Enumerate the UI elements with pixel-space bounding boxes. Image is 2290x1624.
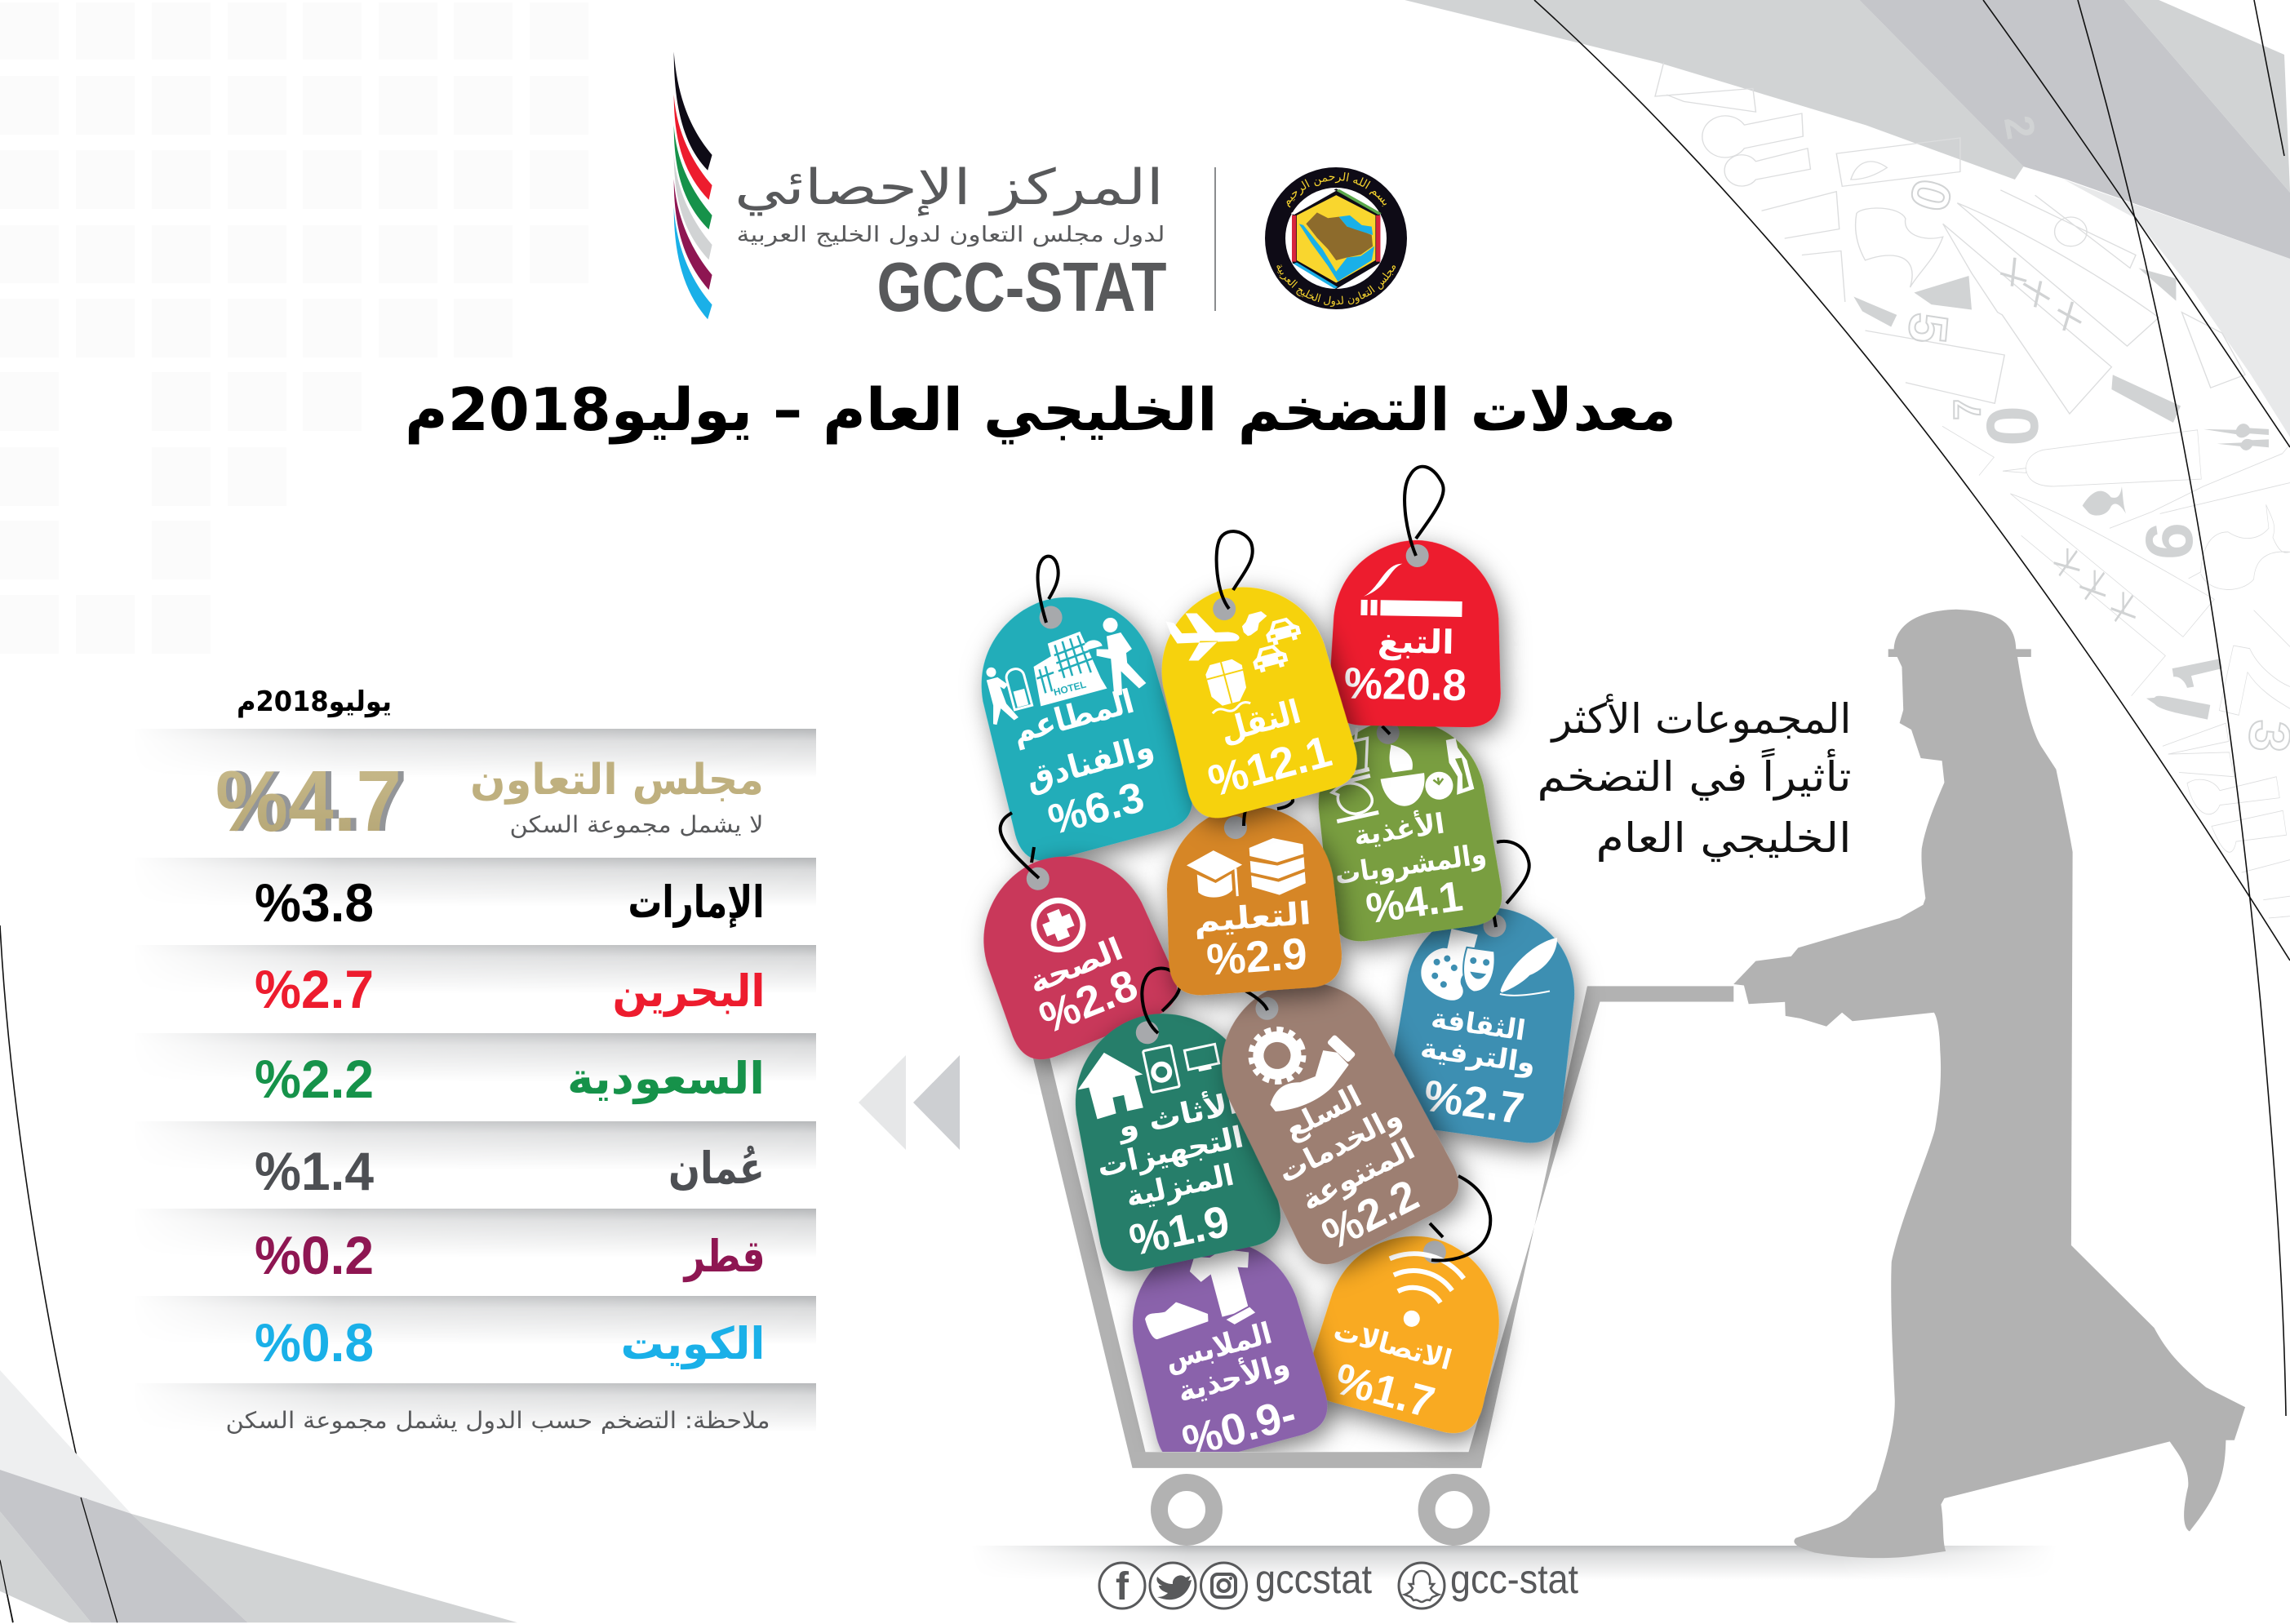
emblem: GCC seal bbox=[1265, 167, 1407, 309]
logo: GCC-STAT wordmark: GCC-STAT bbox=[877, 249, 1167, 326]
tag: communications: الاتصالات bbox=[1330, 1314, 1455, 1377]
background: faint line art bbox=[1655, 46, 2290, 918]
row: Bahrain: %2.7 bbox=[255, 959, 374, 1019]
tag: miscellaneous goods and services: والخدمات bbox=[1273, 1099, 1407, 1190]
tag: furniture and household equipment: المنزلية bbox=[1123, 1159, 1237, 1214]
tag: transport: %12.1 bbox=[1203, 726, 1337, 806]
background: faint line art: 2 bbox=[1995, 112, 2044, 143]
row: Kuwait: %0.8 bbox=[255, 1312, 374, 1373]
tag: culture and entertainment: والترفية bbox=[1418, 1032, 1538, 1080]
row: UAE bbox=[255, 872, 764, 933]
background: faint squares bbox=[0, 2, 588, 654]
tag: furniture and household equipment: التجهيزات bbox=[1094, 1120, 1246, 1184]
tag: food and beverages: الأغذية bbox=[1351, 806, 1447, 853]
background: bottom left grey shapes bbox=[0, 1370, 517, 1622]
background: top right grey shapes bbox=[1405, 0, 2290, 437]
icon: cigarette bbox=[1360, 563, 1462, 617]
shopping cart bbox=[1030, 986, 1733, 1537]
icon: house, washer, screen bbox=[1072, 1030, 1225, 1122]
row: GCC: مجلس التعاون bbox=[470, 756, 764, 805]
tag: food and beverages: والمشروبات bbox=[1333, 838, 1489, 891]
social: gccstat handle: gccstat bbox=[1255, 1556, 1372, 1602]
arrows: double chevron bbox=[859, 1055, 960, 1150]
logo: GCC-STAT ribbon bbox=[674, 51, 712, 319]
tag: food and beverages bbox=[1305, 708, 1506, 945]
tag: furniture and household equipment: %1.9 bbox=[1125, 1196, 1234, 1266]
row: Oman bbox=[255, 1141, 765, 1201]
row: Saudi Arabia: %2.2 bbox=[255, 1049, 374, 1109]
background: faint line art: 9 bbox=[2132, 522, 2206, 560]
row: Bahrain: البحرين bbox=[612, 965, 766, 1017]
tag: communications bbox=[1302, 1176, 1521, 1440]
tag: miscellaneous goods and services: %2.2 bbox=[1315, 1170, 1427, 1260]
tag: restaurants and hotels: والفنادق bbox=[1022, 728, 1158, 798]
tag: health: الصحة bbox=[1023, 930, 1128, 1001]
social: facebook bbox=[1099, 1563, 1145, 1608]
background: faint line art: 5 bbox=[1897, 310, 1959, 346]
tag: clothing and footwear: %0.9- bbox=[1178, 1390, 1301, 1466]
tag: clothing and footwear: والأحذية bbox=[1174, 1345, 1294, 1409]
row: UAE: الإمارات bbox=[628, 876, 764, 928]
tag: furniture and household equipment: الأثاث و bbox=[1112, 1085, 1241, 1145]
ground shadow bbox=[997, 1546, 2030, 1575]
social: gcc-stat handle: gcc-stat bbox=[1450, 1556, 1578, 1602]
tag: education: %2.9 bbox=[1205, 929, 1309, 985]
icon: shirt and shoes bbox=[1145, 1250, 1255, 1340]
icon: gear and hand bbox=[1240, 1000, 1366, 1119]
icon: wifi bbox=[1374, 1246, 1467, 1337]
row: GCC: %4.7 bbox=[221, 753, 407, 850]
row: Oman: عُمان bbox=[668, 1143, 765, 1194]
tag: clothing and footwear: الملابس bbox=[1161, 1316, 1276, 1378]
tag: tobacco: %20.8 bbox=[1343, 659, 1467, 710]
tag: tobacco: التبغ bbox=[1377, 623, 1454, 662]
icon: food items bbox=[1324, 713, 1476, 822]
tag: health: %2.8 bbox=[1032, 961, 1144, 1043]
row: Kuwait bbox=[255, 1312, 766, 1373]
tag: furniture and household equipment bbox=[1056, 968, 1286, 1277]
row: Kuwait: الكويت bbox=[620, 1318, 766, 1369]
row: Saudi Arabia: السعودية bbox=[567, 1053, 765, 1104]
left table: shadow bands bbox=[135, 729, 816, 1432]
icon: hotel, porter and waiter bbox=[974, 613, 1147, 729]
row: GCC bbox=[215, 753, 764, 850]
string: restaurants tag bbox=[1038, 557, 1058, 623]
row: GCC: %4.7 bbox=[215, 753, 402, 850]
social: twitter bbox=[1150, 1563, 1196, 1608]
tag: restaurants and hotels: %6.3 bbox=[1043, 774, 1149, 844]
tag: education bbox=[1158, 786, 1344, 997]
tag: transport: النقل bbox=[1216, 693, 1305, 751]
tag: food and beverages: %4.1 bbox=[1363, 872, 1466, 933]
title: معدلات التضخم الخليجي العام – يوليو2018م bbox=[405, 375, 1676, 445]
icon: hotel, porter and waiter: HOTEL bbox=[1052, 678, 1087, 698]
background: faint line art: 0 bbox=[1971, 406, 2053, 446]
logo: Arabic subtitle: لدول مجلس التعاون لدول الخليج العربية bbox=[736, 223, 1165, 247]
table date heading: يوليو2018م bbox=[237, 686, 392, 718]
tag: culture and entertainment: %2.7 bbox=[1421, 1072, 1527, 1134]
row: Oman: %1.4 bbox=[255, 1141, 374, 1201]
table note: ملاحظة: التضخم حسب الدول يشمل مجموعة السكن bbox=[225, 1407, 770, 1434]
tag: culture and entertainment: الثقافة bbox=[1429, 1002, 1528, 1048]
social: snapchat bbox=[1399, 1563, 1445, 1608]
side caption: المجموعات الأكثر bbox=[1549, 694, 1851, 743]
social: facebook: f bbox=[1116, 1565, 1129, 1608]
icon: graduation cap and books bbox=[1185, 836, 1307, 901]
row: Qatar bbox=[255, 1225, 766, 1285]
background: faint line art: 0 bbox=[1897, 173, 1964, 217]
tag: restaurants and hotels: المطاعم bbox=[1009, 683, 1138, 751]
row: Bahrain bbox=[255, 959, 766, 1019]
emblem: GCC seal: بسم الله الرحمن الرحيم bbox=[1286, 172, 1387, 207]
logo: Arabic name: المركز الإحصائي bbox=[734, 159, 1164, 216]
logo divider bbox=[1214, 167, 1216, 311]
side caption: تأثيراً في التضخم bbox=[1538, 748, 1851, 801]
tag: education: التعليم bbox=[1192, 895, 1312, 940]
social: instagram bbox=[1201, 1563, 1247, 1608]
row: UAE: %3.8 bbox=[255, 872, 374, 933]
tag: restaurants and hotels bbox=[959, 577, 1199, 867]
row: Saudi Arabia bbox=[255, 1049, 765, 1109]
side caption bbox=[1538, 694, 1851, 862]
tag: communications: %1.7 bbox=[1330, 1354, 1440, 1427]
row: Qatar: قطر bbox=[682, 1231, 766, 1282]
side caption: الخليجي العام bbox=[1596, 814, 1851, 862]
tag: miscellaneous goods and services: المتنوعة bbox=[1296, 1132, 1420, 1218]
emblem: GCC seal: مجلس التعاون لدول الخليج العربية bbox=[1276, 264, 1396, 307]
tag: miscellaneous goods and services: السلع bbox=[1279, 1080, 1367, 1147]
tag: clothing and footwear bbox=[1121, 1242, 1350, 1452]
icon: medical cross bbox=[1027, 893, 1090, 957]
background: faint line art: 7 bbox=[1946, 399, 1988, 420]
tag: tobacco bbox=[1329, 467, 1503, 728]
row: GCC: لا يشمل مجموعة السكن bbox=[509, 811, 764, 838]
row: Qatar: %0.2 bbox=[255, 1225, 374, 1285]
icon: palette, masks and feather bbox=[1418, 920, 1558, 1014]
tag: health bbox=[956, 813, 1186, 1068]
tag: miscellaneous goods and services bbox=[1190, 952, 1469, 1275]
tag: transport bbox=[1140, 531, 1364, 825]
tag: culture and entertainment bbox=[1384, 841, 1588, 1147]
man silhouette bbox=[1733, 610, 2245, 1558]
icon: plane, ship and cars bbox=[1154, 581, 1316, 724]
